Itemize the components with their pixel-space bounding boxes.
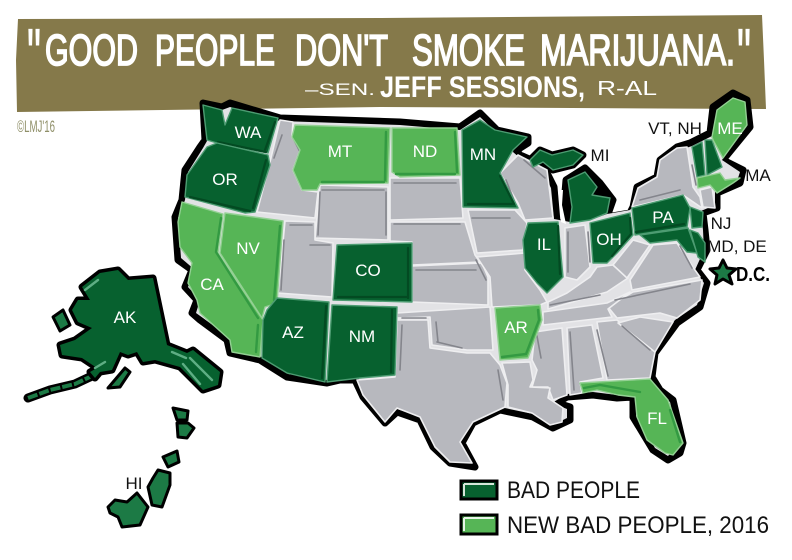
island: Maui [148, 470, 170, 507]
state: CA: CA [200, 275, 224, 294]
map outline [175, 93, 750, 467]
state: KY [548, 265, 628, 309]
outside state labels: MI [591, 146, 609, 165]
legend label: bad people: BAD PEOPLE [507, 477, 640, 504]
state: NY [632, 147, 702, 208]
island: Big Island [108, 493, 148, 527]
state: MA [697, 173, 740, 193]
state: ND: ND [413, 142, 437, 161]
state: PA [632, 195, 690, 235]
state: NM: NM [349, 327, 375, 346]
state: NM [327, 305, 397, 382]
state: AZ [262, 298, 329, 382]
state: FL: FL [647, 409, 667, 428]
Aleutian chain [28, 376, 92, 398]
legend [461, 477, 769, 539]
state: MT: MT [328, 142, 352, 161]
state: FL [580, 379, 683, 455]
state: HI: HI [126, 474, 142, 493]
state: AR: AR [504, 318, 528, 337]
state: OK [397, 307, 493, 350]
non-legal states [257, 120, 715, 463]
quote headline: PEOPLE [155, 26, 275, 75]
state: ND [392, 128, 460, 177]
state: CO [333, 243, 412, 302]
state: TX [357, 320, 507, 463]
legend label: new bad people: NEW BAD PEOPLE, 2016 [507, 512, 769, 539]
state: WV [613, 240, 650, 278]
outside state labels: MD, DE [707, 237, 767, 256]
legend swatch: bad people [461, 481, 497, 499]
outside state labels: MA [745, 166, 771, 185]
state: AR [495, 305, 542, 360]
outside state labels: VT, NH [648, 119, 702, 138]
state: PA: PA [652, 208, 674, 227]
quote headline: DON'T [295, 26, 388, 75]
state: MN: MN [470, 145, 496, 164]
attribution: –SEN. [305, 80, 375, 99]
St Lawrence island [53, 310, 70, 331]
state: AK: AK [114, 308, 137, 327]
state: MD [640, 228, 697, 253]
state: IL [523, 222, 563, 293]
state: GA [597, 320, 655, 380]
state: KS [412, 263, 488, 305]
outside state labels [591, 119, 771, 256]
state: CA [178, 202, 263, 357]
state: ME: ME [717, 119, 743, 138]
state: NJ [690, 207, 703, 228]
legend swatch: new bad people [461, 515, 497, 534]
attribution: R-AL [597, 78, 657, 100]
state: OR [185, 143, 270, 213]
state: VT [692, 142, 705, 177]
title banner [16, 15, 766, 112]
quote headline: " [737, 15, 751, 95]
quote headline [27, 15, 751, 95]
quote headline: SMOKE [412, 26, 525, 75]
state: SD [390, 178, 463, 220]
state: WI [500, 155, 553, 220]
outside state labels: NJ [711, 214, 731, 233]
state: WA: WA [235, 123, 262, 142]
dark and light green states [178, 98, 747, 455]
state: ID [257, 120, 318, 218]
state: IN [565, 225, 590, 280]
island: Oahu [177, 423, 194, 438]
state: NV [220, 213, 283, 318]
state: DE [690, 230, 705, 262]
state: AK [28, 270, 220, 398]
shading strokes on grey states [274, 135, 696, 400]
Upper Michigan outline [530, 150, 583, 170]
state: VA [630, 243, 700, 290]
state: HI [108, 408, 194, 527]
state: OR: OR [212, 170, 238, 189]
state: MI lower [568, 172, 610, 223]
state: IA [468, 210, 527, 253]
attribution [305, 71, 657, 104]
state: MS [532, 328, 567, 400]
island: Molokai [163, 451, 179, 467]
state: TN [543, 292, 630, 325]
state: SC [618, 317, 673, 352]
state: MO [477, 253, 547, 307]
quote headline: GOOD [45, 26, 138, 75]
state: OH [590, 213, 633, 263]
D.C. label: D.C. [736, 264, 770, 286]
state: CT RI [700, 187, 715, 208]
state: NV: NV [236, 239, 260, 258]
state: MI upper [530, 150, 583, 170]
state: AL [567, 325, 603, 395]
credit mark: ©LMJ'16 [17, 117, 55, 136]
icon: D.C. star [710, 260, 736, 284]
state: NE [390, 222, 480, 265]
state: AZ: AZ [282, 323, 304, 342]
state: OH: OH [596, 230, 622, 249]
state: NC [608, 280, 702, 318]
attribution: JEFF SESSIONS, [380, 71, 585, 104]
quote headline: " [27, 15, 41, 95]
state: CO: CO [355, 261, 381, 280]
Kodiak island [108, 368, 130, 388]
state: ME [712, 98, 747, 158]
state: UT [278, 221, 333, 297]
state: MN [462, 120, 527, 208]
state: NH [705, 140, 722, 175]
state: WY [315, 185, 388, 240]
island: Kauai [173, 408, 188, 420]
state: MT [292, 125, 390, 190]
state: LA [502, 362, 563, 425]
state: WA [203, 105, 278, 153]
map interior under-fill [178, 98, 747, 460]
state: IL: IL [537, 235, 551, 254]
